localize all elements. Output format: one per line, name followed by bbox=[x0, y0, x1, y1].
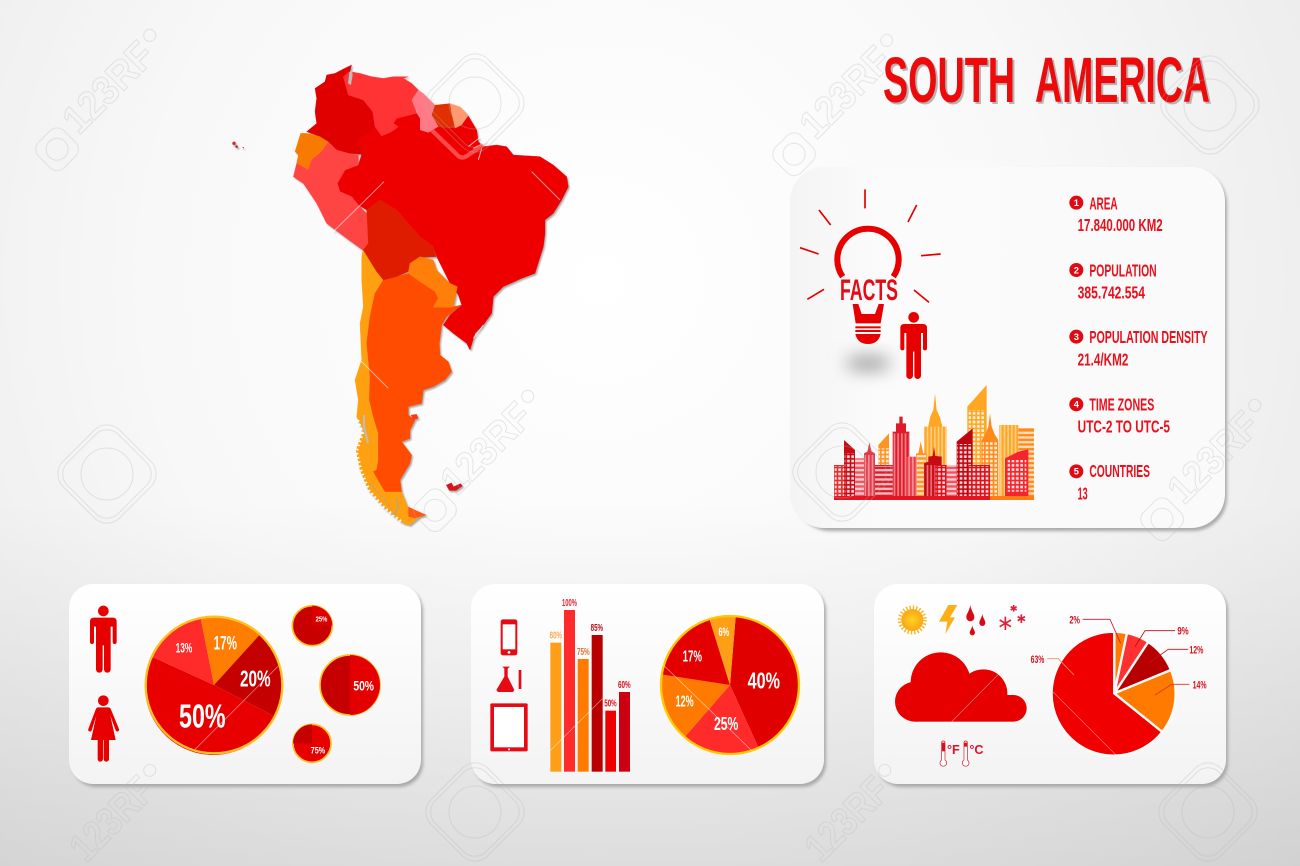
icon: city skyline bbox=[834, 385, 1034, 500]
country: Paraguay bbox=[408, 257, 457, 307]
pie labels: 9% bbox=[1177, 625, 1189, 637]
fact 5: countries: 13 bbox=[1078, 483, 1088, 503]
chart: bars bbox=[550, 598, 631, 772]
watermarks: 123RF bbox=[791, 38, 900, 147]
chart: main pie: 13% bbox=[176, 640, 193, 656]
chart: small pie 75%: 75% bbox=[311, 746, 325, 756]
chart: bars: 75% bbox=[577, 647, 590, 658]
pie labels: 2% bbox=[1069, 614, 1080, 626]
icon: flask bbox=[496, 667, 521, 692]
islands: Falklands bbox=[446, 483, 463, 491]
coast islands: southern Chile bbox=[357, 415, 403, 523]
fact 4: time zones bbox=[1069, 394, 1170, 436]
watermarks: 123RF bbox=[432, 394, 541, 503]
pie labels: 14% bbox=[1193, 680, 1207, 692]
icon: thermometer fahrenheit bbox=[940, 741, 960, 766]
bulb shadow bbox=[845, 356, 892, 371]
icon: thermometer celsius bbox=[962, 741, 984, 766]
watermarks: 123RF bbox=[54, 33, 163, 142]
icon: phone bbox=[501, 619, 517, 655]
icon: thermometer celsius: °C bbox=[969, 743, 984, 757]
chart: bars: 60% bbox=[618, 680, 631, 691]
country: Peru bbox=[293, 142, 368, 252]
country: French Guiana bbox=[450, 103, 468, 128]
fact 2: population: POPULATION bbox=[1089, 260, 1157, 280]
fact 3: population density: 3 bbox=[1074, 332, 1079, 342]
country: Bolivia bbox=[363, 200, 436, 280]
title bbox=[883, 44, 1210, 116]
country: Brazil bbox=[337, 113, 568, 350]
country: Ecuador bbox=[295, 133, 328, 170]
country: Argentina bbox=[367, 273, 462, 492]
panel: demographics bbox=[69, 584, 423, 787]
chart: main pie bbox=[145, 617, 282, 755]
fact 3: population density: 21.4/KM2 bbox=[1078, 350, 1128, 370]
facts illustration and list bbox=[800, 189, 1208, 503]
chart: exploded pie bbox=[1052, 632, 1176, 756]
chart: small pie 75% bbox=[293, 724, 331, 762]
chart: small pie 25% bbox=[292, 606, 332, 646]
fact 1: area: AREA bbox=[1089, 193, 1118, 213]
country: Venezuela bbox=[343, 72, 418, 136]
fact 1: area: 1 bbox=[1074, 198, 1079, 208]
map: South America bbox=[232, 65, 568, 525]
chart: main pie: 17% bbox=[214, 633, 237, 654]
pie leader lines bbox=[1047, 619, 1189, 755]
country: Colombia bbox=[307, 65, 375, 154]
fact 4: time zones: TIME ZONES bbox=[1089, 394, 1154, 414]
chart: main pie: 50% bbox=[179, 698, 226, 735]
icon: person bbox=[900, 312, 927, 379]
islands: Galapagos bbox=[232, 142, 244, 148]
country: Suriname bbox=[432, 103, 455, 128]
icon: tablet bbox=[490, 703, 528, 751]
fact 3: population density bbox=[1069, 327, 1208, 370]
fact 1: area bbox=[1069, 193, 1163, 235]
chart: pie: 25% bbox=[714, 713, 739, 734]
fact 3: population density: POPULATION DENSITY bbox=[1089, 327, 1208, 347]
country: Chile bbox=[355, 248, 420, 525]
title: SOUTH bbox=[883, 44, 1015, 116]
country: Tierra del Fuego bbox=[408, 507, 427, 518]
icon: snowflakes bbox=[1000, 605, 1025, 630]
chart: bars: 50% bbox=[604, 699, 617, 710]
watermark band over Guyana border bbox=[432, 130, 483, 157]
chart: small pie 50%: 50% bbox=[353, 677, 374, 693]
chart: bars: 100% bbox=[562, 598, 577, 609]
watermarks: 123RF bbox=[1159, 403, 1268, 512]
fact 5: countries: COUNTRIES bbox=[1089, 461, 1150, 481]
pie labels: 12% bbox=[1189, 645, 1203, 657]
fact 5: countries: 5 bbox=[1074, 467, 1079, 477]
pie labels bbox=[1031, 614, 1207, 692]
fact 1: area: 17.840.000 KM2 bbox=[1078, 215, 1163, 235]
icon: thermometer fahrenheit: °F bbox=[947, 743, 960, 757]
watermark streak over map bbox=[333, 172, 560, 388]
icon: woman bbox=[88, 695, 119, 762]
chart: small pie 50% bbox=[320, 655, 380, 715]
chart: main pie: 20% bbox=[240, 666, 271, 692]
chart: small pie 25%: 25% bbox=[316, 615, 327, 624]
icon: rain drops bbox=[966, 605, 985, 635]
chart: bars: 85% bbox=[591, 623, 603, 634]
bulb label: FACTS bbox=[840, 274, 898, 307]
panel: technology bbox=[471, 584, 826, 787]
panel: weather bbox=[874, 584, 1228, 787]
icon: cloud bbox=[895, 652, 1027, 722]
icon: man bbox=[90, 606, 117, 673]
pie labels: 63% bbox=[1031, 654, 1044, 666]
chart: pie bbox=[661, 616, 799, 754]
lake Maracaibo bbox=[348, 70, 353, 85]
fact 2: population bbox=[1069, 260, 1157, 302]
chart: pie: 17% bbox=[683, 649, 702, 666]
chart: pie: 12% bbox=[676, 694, 694, 711]
chart: pie: 40% bbox=[748, 667, 780, 693]
panel: facts bbox=[790, 167, 1227, 531]
icon: light bulb bbox=[837, 229, 899, 344]
fact 5: countries bbox=[1069, 461, 1150, 503]
fact 2: population: 385.742.554 bbox=[1078, 282, 1145, 302]
fact 2: population: 2 bbox=[1074, 265, 1079, 275]
chart: bars: 80% bbox=[550, 631, 562, 642]
icon: lightning bbox=[939, 605, 957, 634]
island near coast bbox=[411, 414, 418, 420]
fact 4: time zones: 4 bbox=[1074, 400, 1080, 410]
chart: pie: 6% bbox=[718, 626, 730, 639]
fact 4: time zones: UTC-2 TO UTC-5 bbox=[1078, 416, 1170, 436]
bulb rays bbox=[800, 189, 941, 302]
country: Guyana bbox=[412, 90, 438, 133]
Amazon mouth bbox=[468, 137, 487, 338]
icon: sun bbox=[900, 608, 925, 632]
